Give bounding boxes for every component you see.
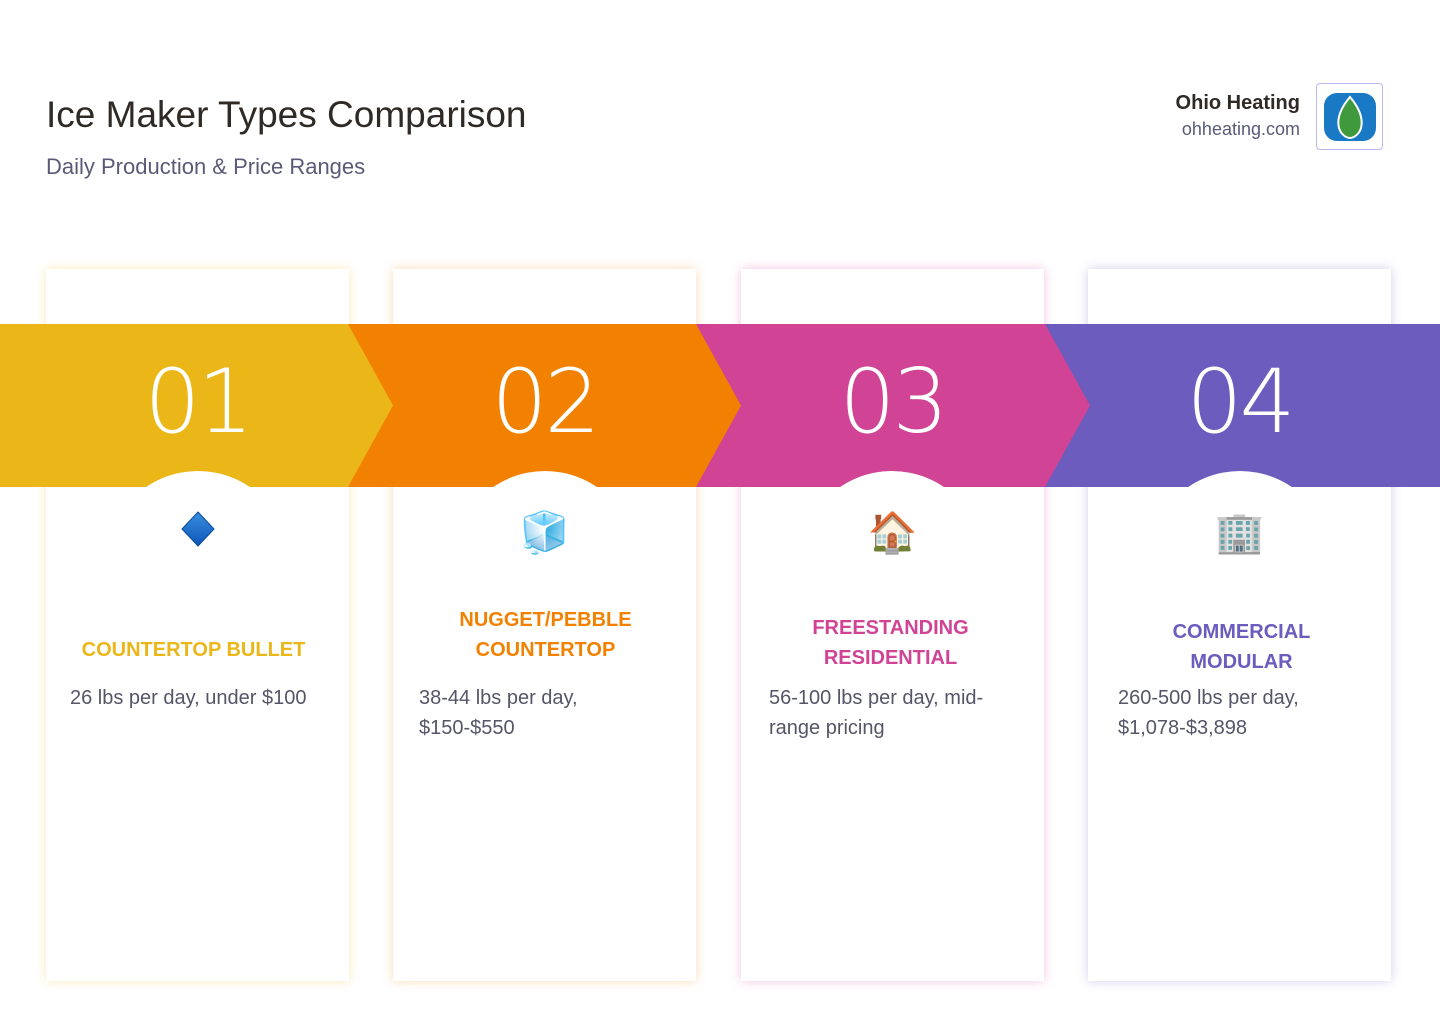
- heading 2: NUGGET/PEBBLE: [459, 609, 632, 631]
- heading 4: COMMERCIAL: [1173, 621, 1310, 643]
- number 02: 02: [492, 350, 597, 453]
- heading 3: FREESTANDING: [812, 617, 969, 639]
- number 04: 04: [1186, 350, 1292, 453]
- text 3: 56-100 lbs per day, mid-: [769, 687, 983, 709]
- heading 4: [1173, 621, 1310, 673]
- text 2: 38-44 lbs per day,: [419, 687, 578, 709]
- text 3: [769, 687, 983, 739]
- text 4: [1118, 687, 1299, 739]
- text 3: range pricing: [769, 717, 885, 739]
- brand: [1176, 83, 1383, 150]
- text 2: [419, 687, 578, 739]
- text 4: $1,078-$3,898: [1118, 717, 1247, 739]
- icon: logo: [1316, 83, 1383, 150]
- icon: diamond: [181, 511, 215, 547]
- arrow band: [0, 324, 1440, 487]
- brand name: Ohio Heating: [1176, 92, 1300, 114]
- heading 2: [459, 609, 632, 661]
- card 2: [393, 269, 696, 981]
- card 3: [741, 269, 1044, 981]
- heading 3: [812, 617, 969, 669]
- icon: building: 🏢: [1215, 509, 1264, 556]
- text 1: 26 lbs per day, under $100: [70, 687, 306, 709]
- card 4: [1088, 269, 1391, 981]
- number 03: 03: [840, 350, 945, 453]
- title: Ice Maker Types Comparison: [46, 94, 527, 135]
- heading 4: MODULAR: [1190, 651, 1293, 673]
- brand url: ohheating.com: [1182, 119, 1300, 139]
- card 1: [46, 269, 349, 981]
- icon: house: 🏠: [868, 509, 917, 556]
- number 01: 01: [144, 350, 250, 453]
- subtitle: Daily Production & Price Ranges: [46, 154, 365, 179]
- text 2: $150-$550: [419, 717, 515, 739]
- heading 2: COUNTERTOP: [476, 639, 615, 661]
- heading 1: COUNTERTOP BULLET: [82, 639, 305, 661]
- heading 3: RESIDENTIAL: [824, 647, 957, 669]
- text 4: 260-500 lbs per day,: [1118, 687, 1299, 709]
- icon: ice cube: 🧊: [520, 509, 569, 556]
